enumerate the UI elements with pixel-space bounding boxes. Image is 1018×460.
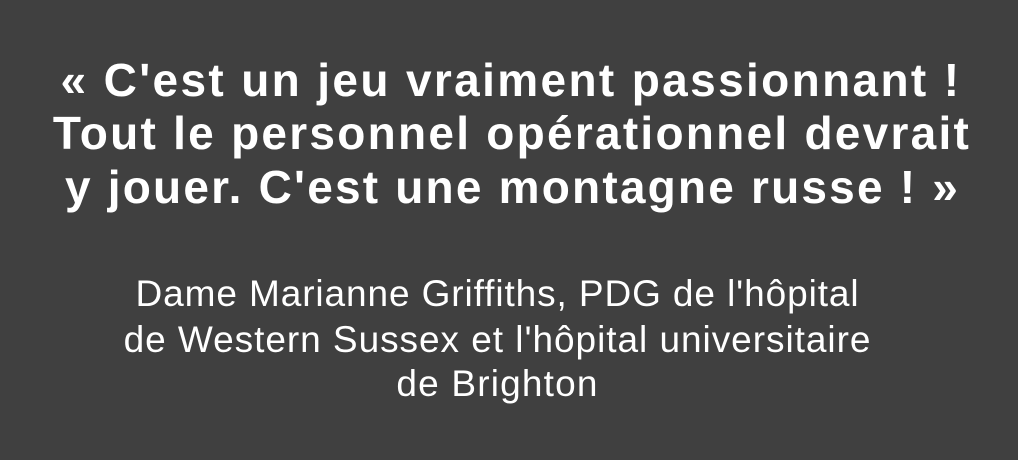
quote: y jouer. C'est une montagne russe ! » [65, 161, 960, 213]
attribution [124, 273, 871, 404]
attribution: Dame Marianne Griffiths, PDG de l'hôpital [136, 273, 859, 314]
attribution: de Western Sussex et l'hôpital universitaire [124, 319, 871, 360]
quote: « C'est un jeu vraiment passionnant ! [61, 54, 961, 106]
quote [53, 54, 971, 213]
attribution: de Brighton [396, 363, 599, 404]
quote: Tout le personnel opérationnel devrait [53, 107, 971, 159]
